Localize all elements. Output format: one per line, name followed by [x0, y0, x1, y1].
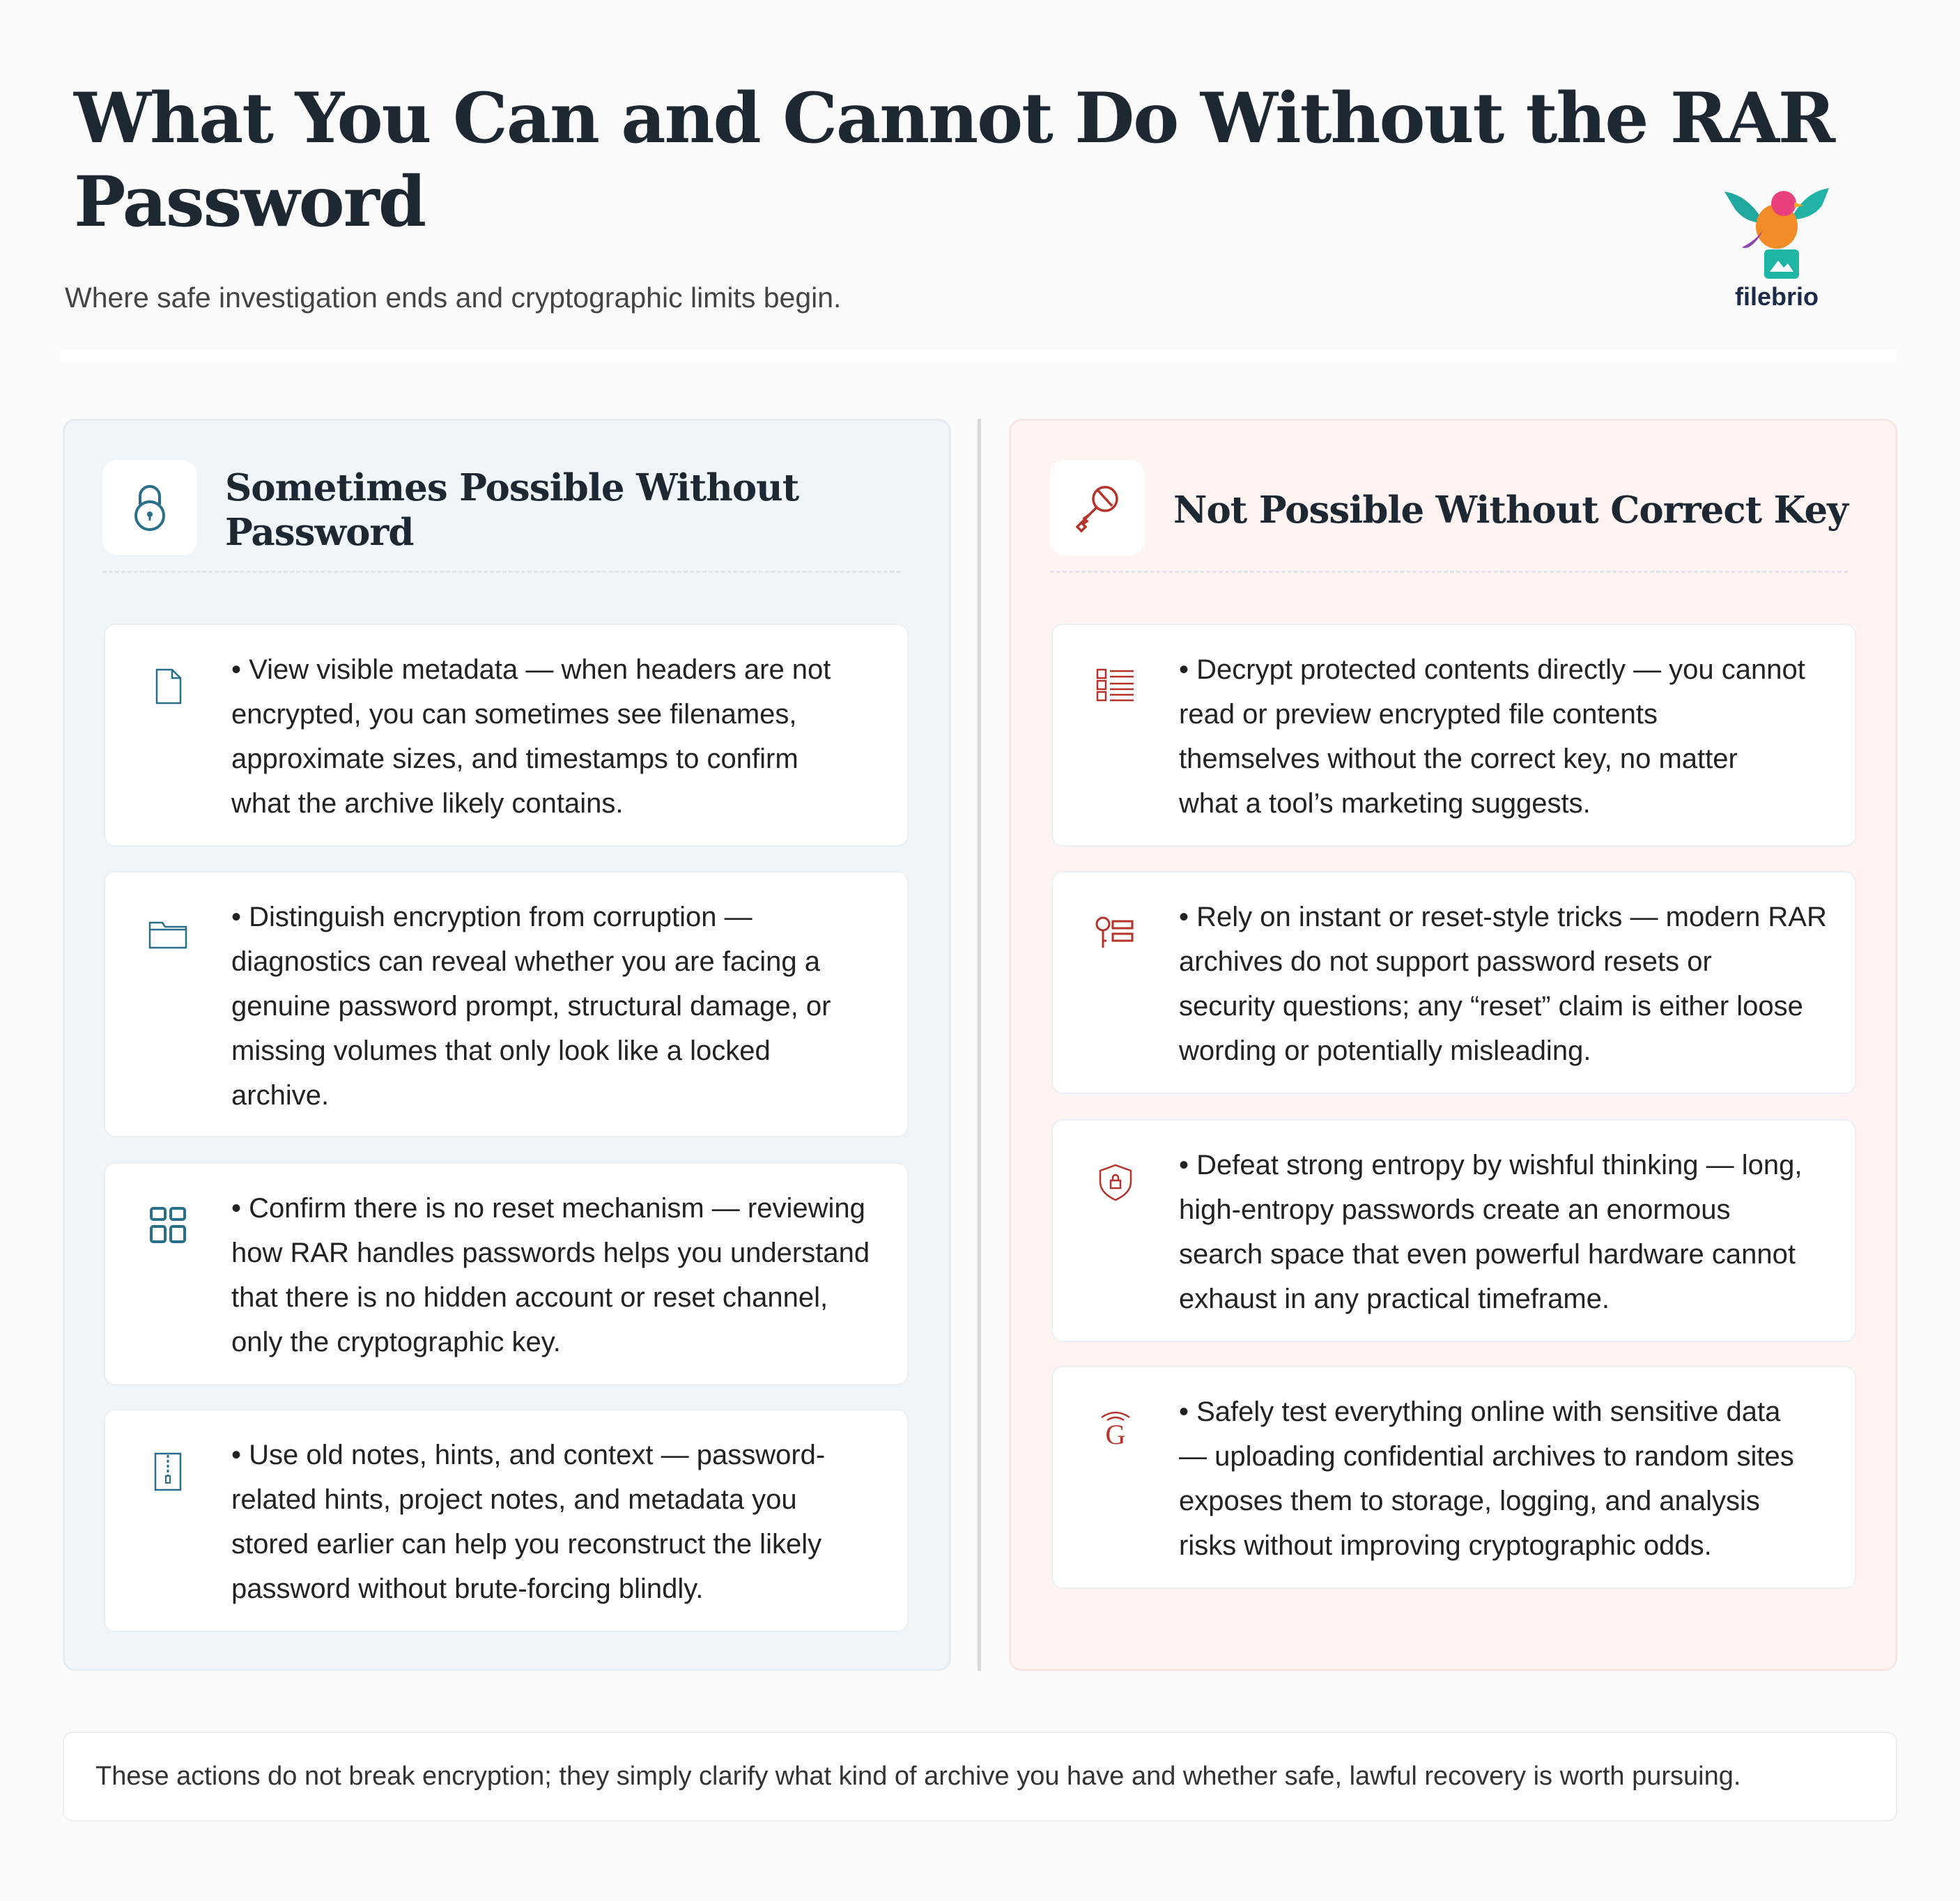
icon: zip file: [155, 1452, 181, 1491]
card 3: • Confirm there is no reset mechanism — reviewing: [231, 1193, 865, 1224]
card 3: exhaust in any practical timeframe.: [1179, 1284, 1610, 1314]
header icon: lock: [102, 460, 197, 555]
card 4: password without brute-forcing blindly.: [231, 1573, 703, 1604]
card 2: • Distinguish encryption from corruption —: [231, 902, 753, 932]
panel: not possible: [1009, 419, 1897, 1671]
card 2: [1051, 871, 1856, 1094]
icon: G web: [1101, 1412, 1130, 1449]
header icon: key: [1050, 460, 1145, 555]
card 3: [1051, 1119, 1856, 1342]
icon: key list: [1095, 917, 1133, 948]
logo text: filebrio: [1735, 282, 1819, 311]
title: What You Can and Cannot Do Without the RAR: [74, 78, 1834, 159]
title: [73, 78, 1836, 243]
card 3: high-entropy passwords create an enormous: [1179, 1194, 1731, 1225]
card 4: stored earlier can help you reconstruct the likely: [231, 1529, 821, 1560]
card 4: related hints, project notes, and metadata you: [231, 1484, 797, 1515]
card 2: archive.: [231, 1080, 329, 1111]
card 2: archives do not support password resets or: [1179, 946, 1712, 977]
card 2: • Rely on instant or reset-style tricks — modern RAR: [1179, 902, 1827, 932]
icon: G web: G: [1106, 1419, 1125, 1449]
card 3: search space that even powerful hardware cannot: [1179, 1239, 1796, 1270]
icon: folder: [149, 921, 187, 949]
footer note: These actions do not break encryption; they simply clarify what kind of archive you have and whether safe, lawful recovery is worth pursuing.: [95, 1762, 1741, 1791]
card 4: [104, 1409, 909, 1632]
panel: sometimes possible: [63, 419, 951, 1671]
card 1: • Decrypt protected contents directly — you cannot: [1179, 654, 1805, 685]
card 1: • View visible metadata — when headers are not: [231, 654, 831, 685]
title: Password: [74, 162, 425, 243]
card 1: what the archive likely contains.: [231, 788, 623, 819]
card 4: [1051, 1366, 1856, 1589]
card 2: security questions; any “reset” claim is either loose: [1179, 991, 1803, 1022]
card 2: diagnostics can reveal whether you are facing a: [231, 946, 820, 977]
card 3: [104, 1162, 909, 1385]
icon: grid: [150, 1207, 186, 1243]
card 1: [1051, 624, 1856, 847]
card 2: genuine password prompt, structural damage, or: [231, 991, 831, 1022]
header text: Password: [225, 511, 413, 554]
icon: file: [156, 669, 181, 704]
card 3: that there is no hidden account or reset channel,: [231, 1282, 828, 1313]
card 4: exposes them to storage, logging, and analysis: [1179, 1486, 1760, 1516]
card 4: — uploading confidential archives to random sites: [1179, 1441, 1794, 1472]
subtitle: Where safe investigation ends and cryptographic limits begin.: [65, 282, 841, 314]
header text: Sometimes Possible Without: [225, 466, 798, 509]
header text: Not Possible Without Correct Key: [1173, 488, 1848, 532]
card 1: approximate sizes, and timestamps to confirm: [231, 744, 798, 774]
icon: shield: [1099, 1164, 1132, 1201]
card 1: themselves without the correct key, no matter: [1179, 744, 1738, 774]
card 1: encrypted, you can sometimes see filenames,: [231, 699, 797, 730]
card 4: risks without improving cryptographic odds.: [1179, 1530, 1712, 1561]
card 2: missing volumes that only look like a locked: [231, 1036, 771, 1066]
footer note: [63, 1732, 1897, 1822]
card 1: [104, 624, 909, 847]
card 3: how RAR handles passwords helps you understand: [231, 1238, 870, 1268]
card 4: • Safely test everything online with sensitive data: [1179, 1396, 1780, 1427]
card 2: [104, 871, 909, 1137]
card 1: what a tool’s marketing suggests.: [1179, 788, 1591, 819]
card 3: • Defeat strong entropy by wishful thinking — long,: [1179, 1150, 1802, 1180]
logo: [1724, 188, 1829, 311]
header text: [225, 466, 799, 554]
header bar: [60, 350, 1897, 362]
icon: list: [1097, 669, 1134, 701]
card 1: read or preview encrypted file contents: [1179, 699, 1658, 730]
card 4: • Use old notes, hints, and context — password-: [231, 1440, 825, 1470]
card 3: only the cryptographic key.: [231, 1327, 561, 1357]
card 2: wording or potentially misleading.: [1179, 1036, 1591, 1066]
